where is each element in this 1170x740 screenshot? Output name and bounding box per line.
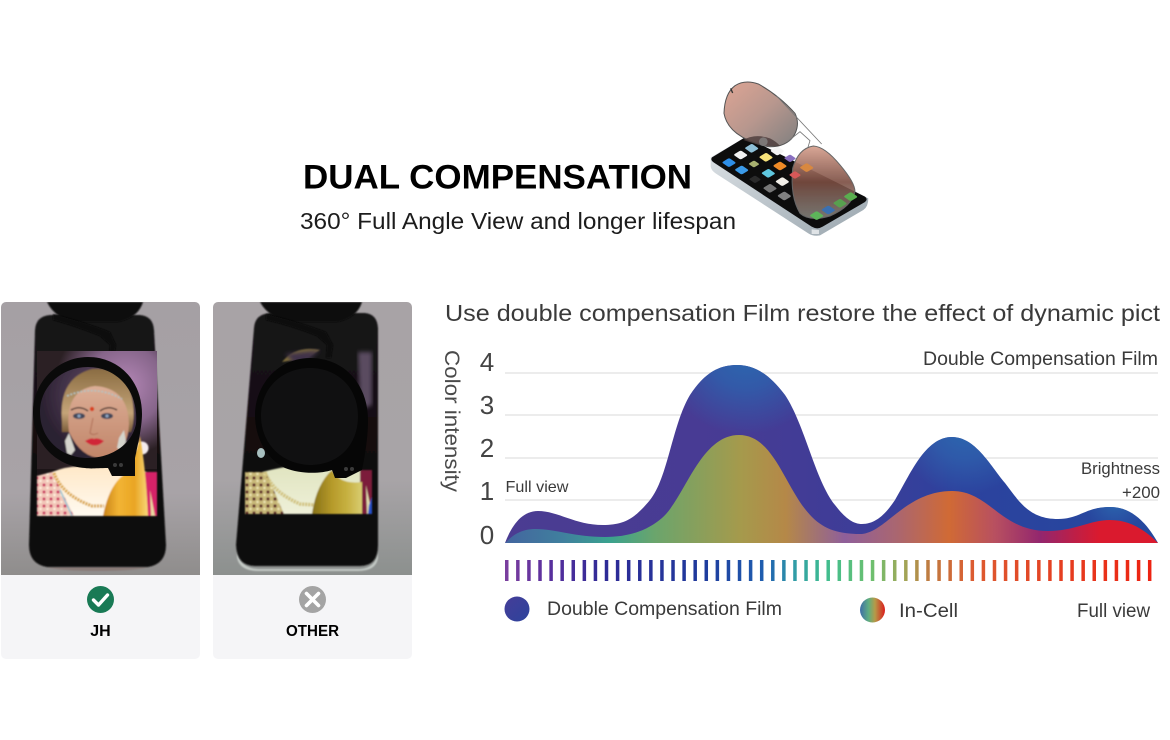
- y axis numbers: 1: [480, 476, 494, 506]
- JH card footer: [1, 575, 200, 659]
- y axis numbers: [480, 347, 494, 550]
- y axis title: Color intensity: [440, 350, 463, 493]
- label: full view: Full view: [506, 479, 569, 496]
- legend: in-cell: [860, 598, 958, 622]
- panel: OTHER comparison card: [213, 302, 412, 659]
- title: DUAL COMPENSATION: [303, 158, 692, 196]
- area: in-cell: [505, 435, 1158, 543]
- legend: full view: Full view: [1077, 601, 1150, 622]
- legend: in-cell: In-Cell: [899, 600, 958, 622]
- subtitle: 360° Full Angle View and longer lifespan: [300, 208, 736, 234]
- legend: double compensation film: Double Compensation Film: [547, 598, 782, 620]
- y axis numbers: 0: [480, 520, 494, 550]
- OTHER card footer: [213, 575, 412, 659]
- label: OTHER: OTHER: [286, 623, 339, 640]
- area: double compensation film: [505, 365, 1158, 543]
- y axis numbers: 3: [480, 390, 494, 420]
- y axis numbers: 4: [480, 347, 494, 377]
- chart heading: Use double compensation Film restore the effect of dynamic pict: [445, 300, 1161, 326]
- legend: [504, 596, 1150, 622]
- chart: colour intensity area chart: [440, 347, 1160, 570]
- label: double compensation film: Double Compensation Film: [923, 348, 1158, 370]
- y axis numbers: 2: [480, 433, 494, 463]
- OTHER phone photo: [213, 302, 412, 575]
- label: brightness +200: [1081, 460, 1160, 502]
- label: brightness +200: +200: [1122, 484, 1160, 502]
- label: JH: JH: [90, 623, 111, 640]
- icon: grey cross badge: [299, 586, 326, 613]
- panel: JH comparison card: [1, 302, 200, 659]
- icon: green check badge: [87, 586, 114, 613]
- icon: sunglasses over phone: [711, 82, 868, 236]
- label: brightness +200: Brightness: [1081, 460, 1160, 478]
- JH phone photo: [1, 302, 200, 575]
- spectrum bars: [505, 560, 1159, 581]
